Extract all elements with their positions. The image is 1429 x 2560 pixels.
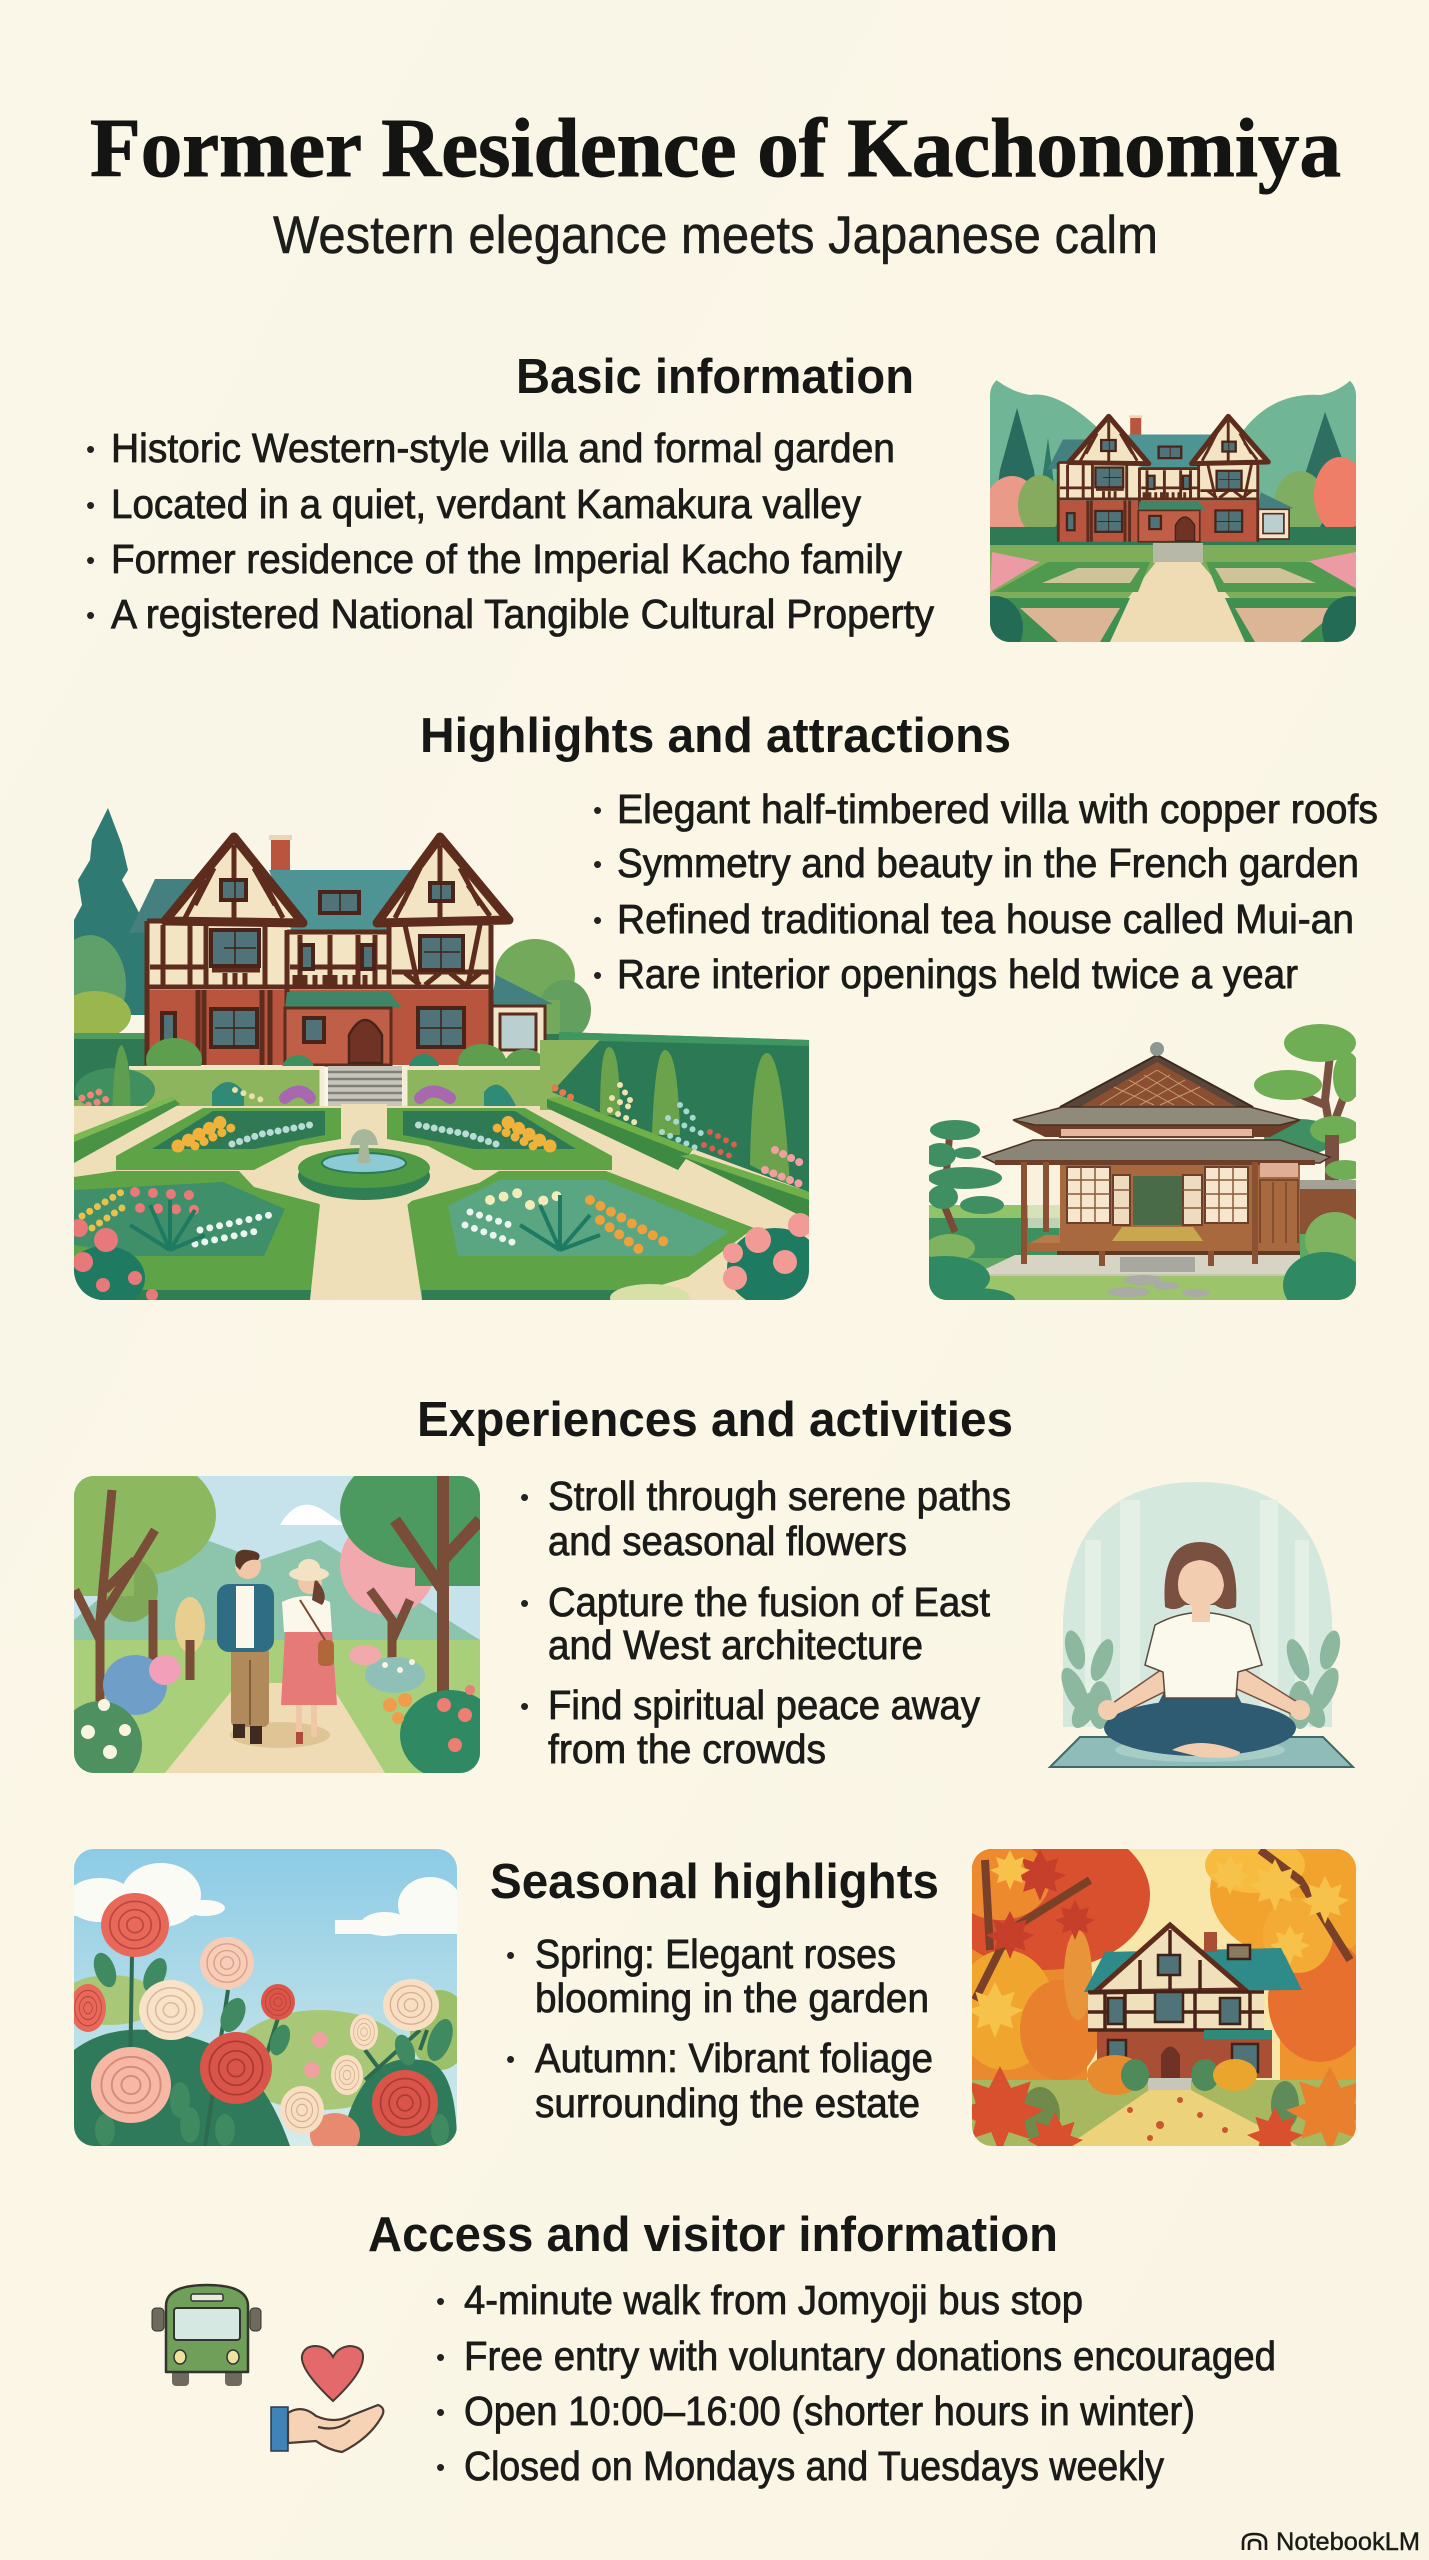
bullet list: highlights: •	[593, 795, 602, 825]
bullet list: basic information: A registered National Tangible Cultural Property	[111, 591, 934, 637]
illustration: autumn estate	[972, 1849, 1356, 2146]
bullet list: highlights: •	[593, 905, 602, 935]
bullet list: experiences: Stroll through serene paths	[548, 1473, 1011, 1519]
bullet list: experiences	[520, 1473, 1011, 1772]
logo: NotebookLM: NotebookLM	[1276, 2528, 1420, 2556]
bullet list: highlights: Symmetry and beauty in the French garden	[617, 840, 1359, 886]
bullet list: access: •	[436, 2452, 445, 2482]
bullet list: experiences: Capture the fusion of East	[548, 1579, 991, 1625]
bullet list: access: •	[436, 2342, 445, 2372]
bullet list: access: Open 10:00–16:00 (shorter hours in winter)	[464, 2388, 1195, 2434]
bullet list: highlights: •	[593, 960, 602, 990]
bullet list: basic information: Located in a quiet, verdant Kamakura valley	[111, 481, 861, 527]
illustration: couple strolling in the garden	[74, 1476, 480, 1773]
bullet list: highlights: Rare interior openings held twice a year	[617, 951, 1298, 997]
illustration: spring roses	[60, 1849, 470, 2157]
bullet list: seasonal: •	[506, 1940, 515, 1970]
heading: access and visitor information: Access and visitor information	[368, 2208, 1058, 2262]
bullet list: highlights	[593, 786, 1378, 997]
bullet list: highlights: Elegant half-timbered villa with copper roofs	[617, 786, 1378, 832]
illustration: tea house Mui-an	[929, 1024, 1356, 1300]
bullet list: basic information: Historic Western-style villa and formal garden	[111, 425, 895, 471]
bullet list: access: •	[436, 2397, 445, 2427]
heading: basic information: Basic information	[516, 350, 914, 404]
bullet list: seasonal: surrounding the estate	[535, 2080, 920, 2126]
illustration: meditating woman	[1050, 1482, 1353, 1767]
subtitle: Western elegance meets Japanese calm	[273, 206, 1158, 265]
bullet list: highlights: •	[593, 849, 602, 879]
bullet list: experiences: •	[520, 1588, 529, 1618]
bullet list: access: Free entry with voluntary donations encouraged	[464, 2333, 1276, 2379]
bullet list: experiences: from the crowds	[548, 1726, 826, 1772]
bullet list: basic information: •	[86, 600, 95, 630]
title: Former Residence of Kachonomiya	[90, 102, 1341, 195]
heading: experiences: Experiences and activities	[417, 1393, 1013, 1447]
bullet list: access: •	[436, 2286, 445, 2316]
bullet list: seasonal: •	[506, 2044, 515, 2074]
bullet list: access: Closed on Mondays and Tuesdays weekly	[464, 2443, 1164, 2489]
bullet list: experiences: and seasonal flowers	[548, 1518, 907, 1564]
heading: highlights: Highlights and attractions	[420, 709, 1011, 763]
bullet list: seasonal	[506, 1931, 933, 2126]
bullet list: experiences: •	[520, 1482, 529, 1512]
bullet list: basic information	[86, 425, 934, 637]
bullet list: experiences: •	[520, 1691, 529, 1721]
bullet list: experiences: and West architecture	[548, 1622, 923, 1668]
bullet list: basic information: •	[86, 490, 95, 520]
bullet list: seasonal: Autumn: Vibrant foliage	[535, 2035, 933, 2081]
heading: seasonal highlights: Seasonal highlights	[490, 1855, 939, 1909]
bullet list: seasonal: blooming in the garden	[535, 1975, 929, 2021]
bullet list: basic information: •	[86, 434, 95, 464]
bullet list: experiences: Find spiritual peace away	[548, 1682, 980, 1728]
icon: heart over hand	[271, 2346, 383, 2452]
illustration: villa and garden, small	[990, 380, 1356, 642]
bullet list: access	[436, 2277, 1276, 2489]
bullet list: seasonal: Spring: Elegant roses	[535, 1931, 896, 1977]
bullet list: access: 4-minute walk from Jomyoji bus stop	[464, 2277, 1083, 2323]
bullet list: basic information: Former residence of the Imperial Kacho family	[111, 536, 902, 582]
illustration: villa and French garden	[54, 808, 823, 1312]
bullet list: highlights: Refined traditional tea house called Mui-an	[617, 896, 1354, 942]
icon: bus	[152, 2285, 261, 2386]
bullet list: basic information: •	[86, 545, 95, 575]
